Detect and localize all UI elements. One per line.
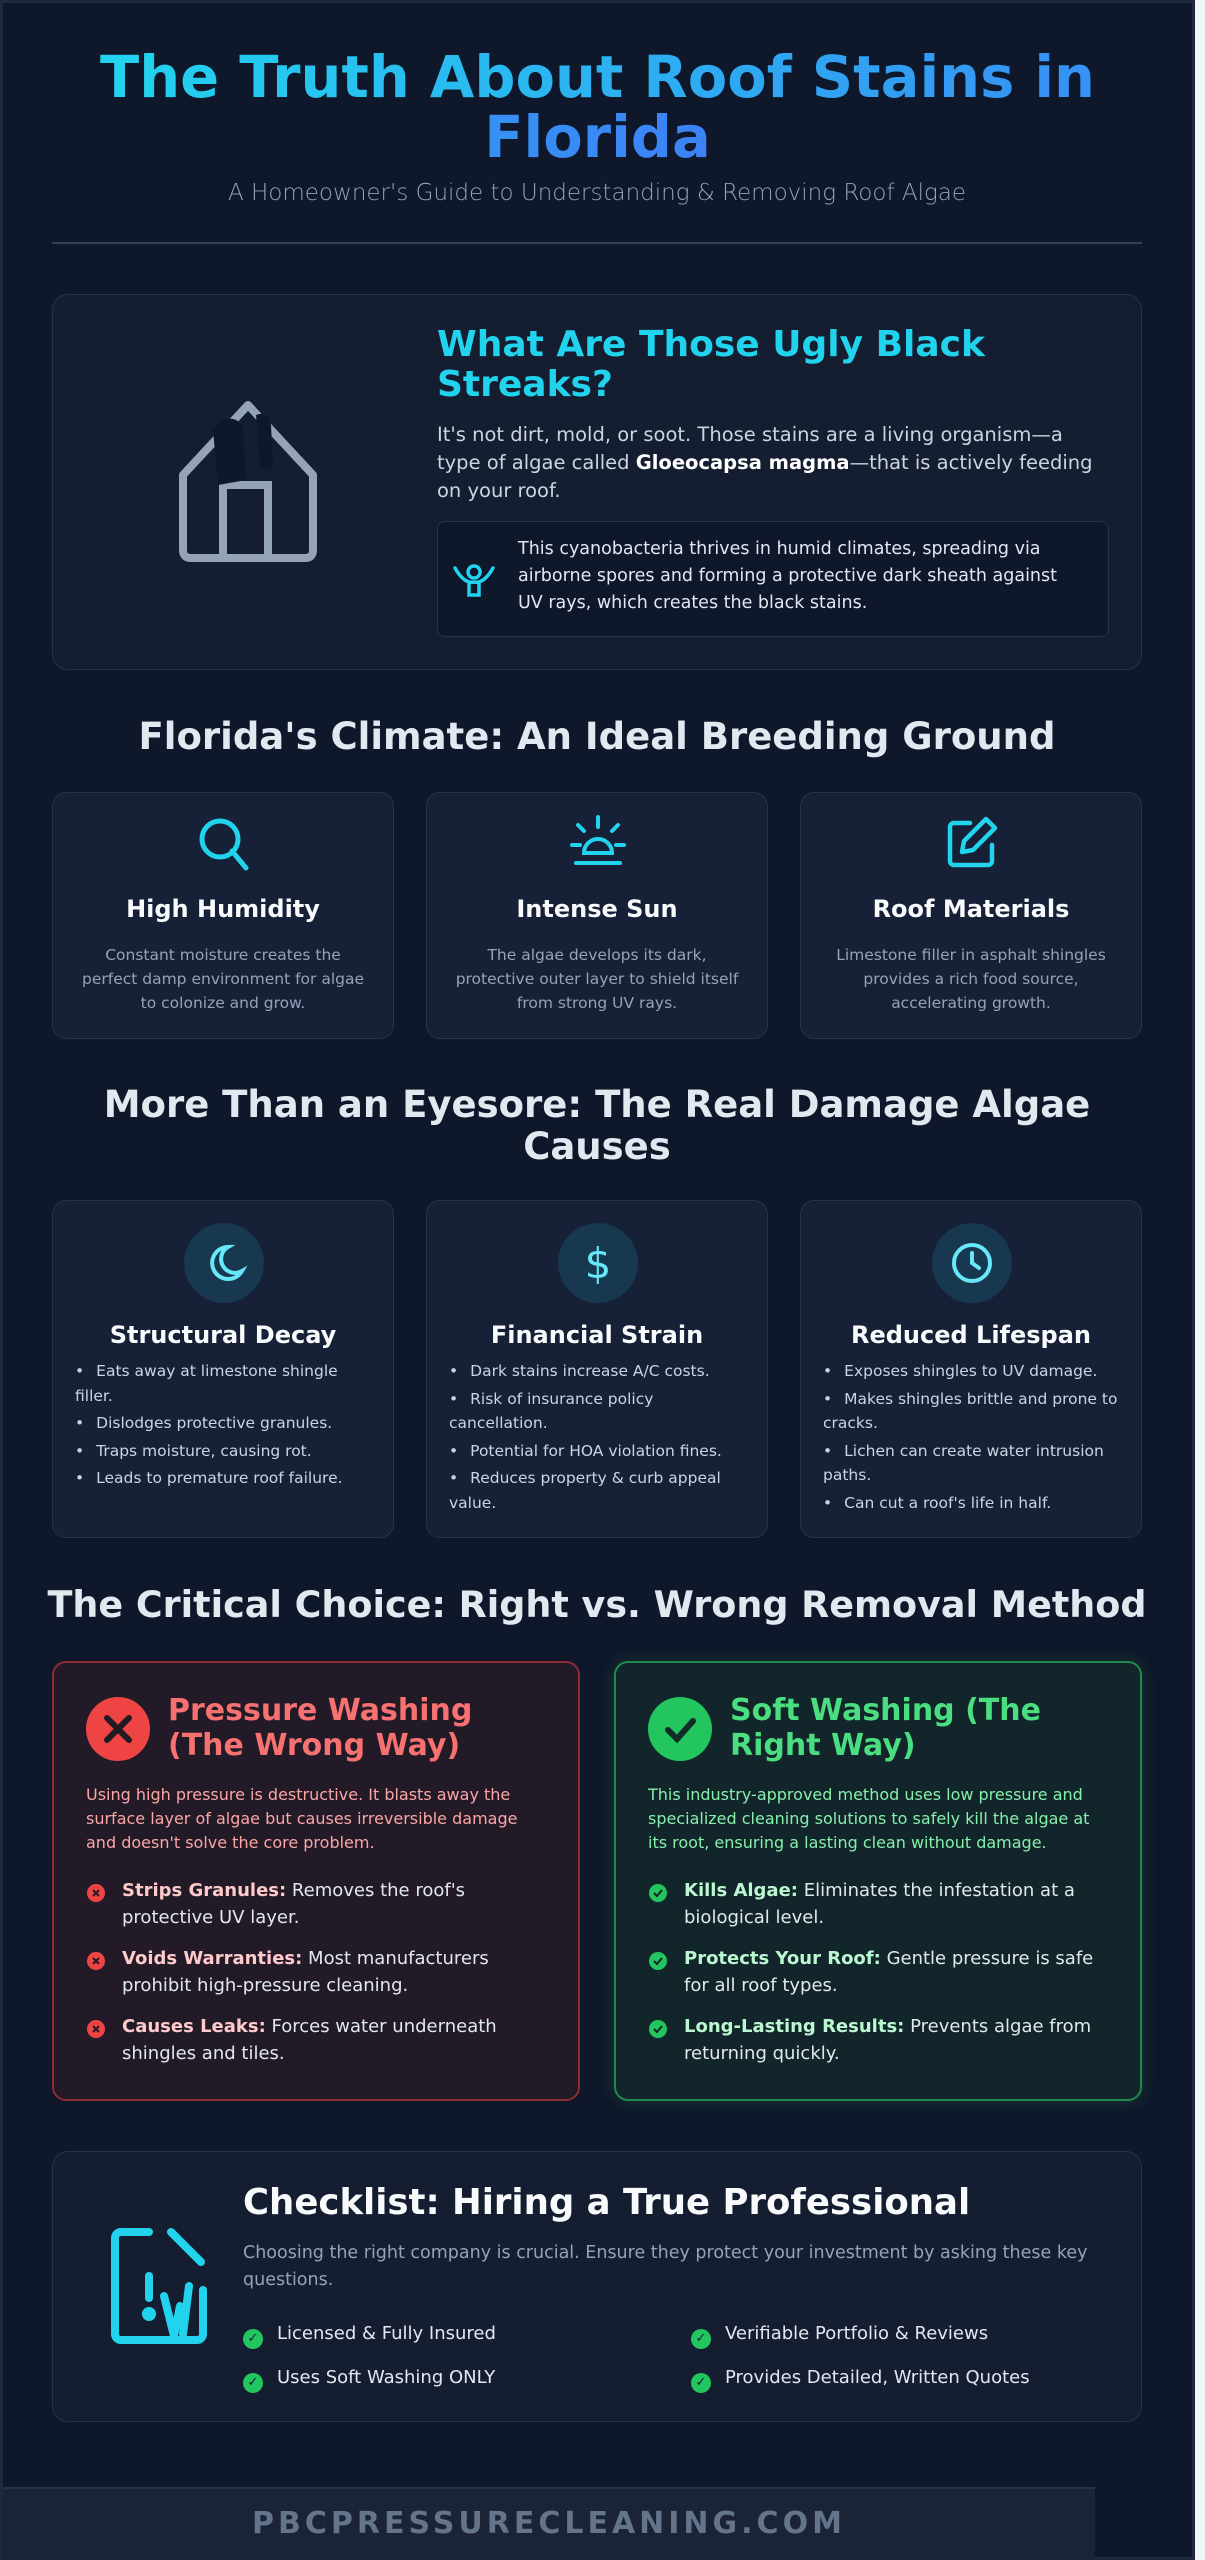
- panel: soft washing: Long-Lasting Results: Prevents algae from returning quickly.: [684, 2016, 1091, 2064]
- panel: pressure washing: Voids Warranties: Most manufacturers prohibit high-pressure cleaning.: [122, 1948, 489, 1996]
- heading: Streaks?: [437, 364, 613, 405]
- panel: checklist: Licensed & Fully Insured: [277, 2323, 496, 2344]
- panel: pressure washing: [52, 1661, 580, 2101]
- icon: search: [200, 818, 248, 870]
- panel: checklist: ✓: [696, 2331, 706, 2346]
- icon: moon: [184, 1223, 264, 1303]
- panel: checklist: ✓: [696, 2375, 706, 2390]
- icon: dollar: $: [585, 1238, 611, 1288]
- panel: pressure washing: Using high pressure is destructive. It blasts away the surface layer of algae but causes irreversible damage and doesn't solve the core problem.: [86, 1785, 517, 1852]
- card: financial: Reduces property & curb appeal value.: [449, 1469, 721, 1512]
- icon: bacteria: [453, 564, 495, 597]
- panel: checklist: Provides Detailed, Written Quotes: [725, 2367, 1030, 2388]
- card: financial: Dark stains increase A/C costs.: [470, 1362, 710, 1380]
- heading: climate: Florida's Climate: An Ideal Breeding Ground: [139, 715, 1055, 758]
- title: [100, 44, 1095, 171]
- heading: damage: Causes: [523, 1125, 671, 1168]
- card: structural decay: [52, 1200, 394, 1538]
- card: lifespan: Exposes shingles to UV damage.: [844, 1362, 1097, 1380]
- heading: critical choice: The Critical Choice: Right vs. Wrong Removal Method: [48, 1583, 1146, 1626]
- card: materials: [800, 792, 1142, 1039]
- heading: [437, 324, 986, 405]
- card: financial: Risk of insurance policy cancellation.: [449, 1390, 653, 1432]
- icon: clock: [932, 1223, 1012, 1303]
- panel: soft washing: Kills Algae: Eliminates the infestation at a biological level.: [684, 1880, 1075, 1928]
- card: sun: The algae develops its dark, protective outer layer to shield itself from strong UV rays.: [456, 946, 738, 1012]
- panel: soft washing: Right Way): [730, 1728, 916, 1763]
- heading: damage: More Than an Eyesore: The Real Damage Algae: [104, 1083, 1090, 1126]
- icon: house with stains: [179, 401, 317, 562]
- icon: checklist: [111, 2228, 207, 2344]
- footer: PBCPRESSURECLEANING.COM: [252, 2506, 846, 2541]
- panel: pressure washing: (The Wrong Way): [168, 1728, 460, 1763]
- panel: soft washing: Protects Your Roof: Gentle pressure is safe for all roof types.: [684, 1948, 1093, 1996]
- panel: soft washing: This industry-approved method uses low pressure and specialized cleaning solutions to safely kill the algae at its root, ensuring a lasting clean without damage.: [648, 1785, 1089, 1852]
- subtitle: A Homeowner's Guide to Understanding & Removing Roof Algae: [228, 180, 966, 206]
- card: humidity: High Humidity: [126, 895, 320, 923]
- card: financial: [426, 1200, 768, 1538]
- panel: checklist: Verifiable Portfolio & Reviews: [725, 2323, 988, 2344]
- footer: [3, 2487, 1095, 2560]
- panel: soft washing: Soft Washing (The: [730, 1693, 1041, 1728]
- card: lifespan: Makes shingles brittle and prone to cracks.: [823, 1390, 1117, 1432]
- panel: pressure washing: Strips Granules: Removes the roof's protective UV layer.: [122, 1880, 465, 1928]
- title: The Truth About Roof Stains in: [100, 44, 1095, 111]
- panel: checklist: ✓: [248, 2331, 258, 2346]
- card: structural decay: Structural Decay: [110, 1321, 336, 1349]
- panel: checklist: ✓: [248, 2375, 258, 2390]
- card: financial: Financial Strain: [491, 1321, 703, 1349]
- card: materials: Roof Materials: [873, 895, 1069, 923]
- card: structural decay: Traps moisture, causing rot.: [96, 1442, 312, 1460]
- card: structural decay: Eats away at limestone shingle filler.: [75, 1362, 338, 1404]
- icon: x: [86, 1697, 150, 1761]
- card: lifespan: Reduced Lifespan: [851, 1321, 1091, 1349]
- icon: sun: [570, 815, 626, 865]
- card: lifespan: Lichen can create water intrusion paths.: [823, 1442, 1104, 1484]
- panel: checklist: Checklist: Hiring a True Professional: [243, 2182, 970, 2223]
- card: materials: Limestone filler in asphalt shingles provides a rich food source, accelerating growth.: [836, 946, 1106, 1012]
- card: humidity: Constant moisture creates the perfect damp environment for algae to colonize and grow.: [82, 946, 364, 1012]
- panel: what are black streaks: [52, 294, 1142, 670]
- card: structural decay: Dislodges protective granules.: [96, 1414, 332, 1432]
- panel: checklist: Uses Soft Washing ONLY: [277, 2367, 495, 2388]
- icon: edit: [948, 816, 998, 868]
- panel: checklist: [52, 2151, 1142, 2422]
- title: Florida: [484, 104, 711, 171]
- card: financial: Potential for HOA violation fines.: [470, 1442, 722, 1460]
- card: humidity: [52, 792, 394, 1039]
- heading: damage: [104, 1083, 1090, 1168]
- icon: dollar: [558, 1223, 638, 1303]
- panel: pressure washing: Causes Leaks: Forces water underneath shingles and tiles.: [122, 2016, 497, 2064]
- callout: This cyanobacteria thrives in humid climates, spreading via airborne spores and forming a protective dark sheath against UV rays, which creates the black stains.: [518, 539, 1057, 613]
- text: It's not dirt, mold, or soot. Those stains are a living organism—a type of algae called Gloeocapsa magma—that is actively feeding on your roof.: [437, 423, 1092, 502]
- card: lifespan: [800, 1200, 1142, 1538]
- panel: soft washing: [614, 1661, 1142, 2101]
- icon: check: [648, 1697, 712, 1761]
- panel: pressure washing: Pressure Washing: [168, 1693, 472, 1728]
- card: structural decay: Leads to premature roof failure.: [96, 1469, 343, 1487]
- card: sun: Intense Sun: [516, 895, 678, 923]
- card: sun: [426, 792, 768, 1039]
- heading: What Are Those Ugly Black: [437, 324, 985, 365]
- callout: [437, 521, 1109, 637]
- card: lifespan: Can cut a roof's life in half.: [844, 1494, 1051, 1512]
- panel: checklist: Choosing the right company is crucial. Ensure they protect your investment by asking these key questions.: [243, 2243, 1087, 2290]
